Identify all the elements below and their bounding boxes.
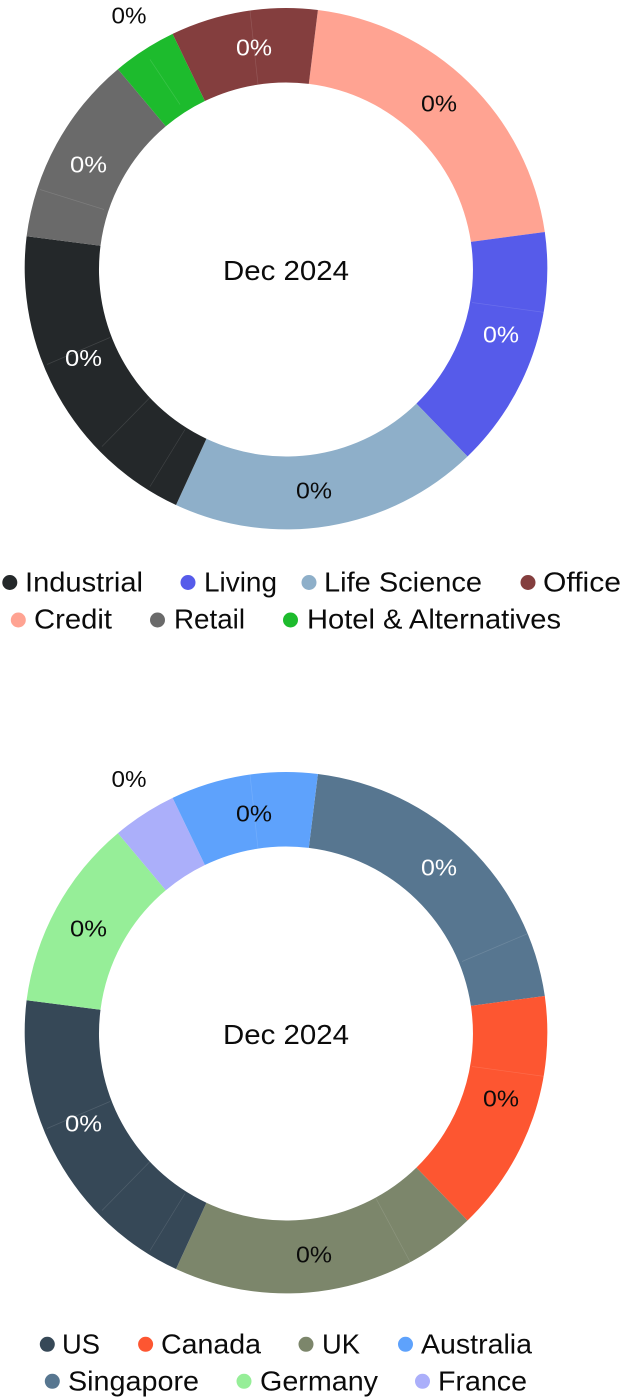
legend item: Office: Office bbox=[543, 567, 621, 598]
segment: Life Science bbox=[176, 404, 468, 529]
label: Singapore percent: 0% bbox=[421, 854, 457, 880]
label: Hotel & Alternatives percent: 0% bbox=[112, 2, 147, 28]
legend item: UK: UK bbox=[322, 1329, 361, 1360]
label: Credit percent: 0% bbox=[421, 90, 457, 116]
label: Germany percent: 0% bbox=[70, 916, 107, 942]
segment: Credit bbox=[309, 10, 545, 242]
segment: Canada bbox=[416, 996, 547, 1220]
segment: Australia bbox=[173, 772, 318, 865]
label: France percent: 0% bbox=[112, 766, 147, 792]
legend item: Hotel & Alternatives: Hotel & Alternatives bbox=[307, 604, 561, 634]
legend item: Australia: Australia bbox=[421, 1329, 533, 1360]
center label: Dec 2024 bbox=[223, 255, 349, 286]
legend item: France: France bbox=[438, 1365, 527, 1396]
segment: Living bbox=[416, 232, 547, 456]
segment: Industrial bbox=[25, 236, 206, 505]
donut ring: geographies bbox=[25, 772, 547, 1293]
legend item: Germany: Germany bbox=[260, 1365, 378, 1396]
panel: sector donut chart bbox=[25, 2, 547, 529]
legend item: Credit: Credit bbox=[34, 604, 112, 634]
label: Office percent: 0% bbox=[236, 34, 272, 60]
legend item: Canada: Canada bbox=[161, 1329, 262, 1360]
segment: Retail bbox=[27, 69, 166, 246]
legend: geographies bbox=[40, 1329, 533, 1396]
legend item: Retail: Retail bbox=[174, 604, 245, 634]
label: UK percent: 0% bbox=[296, 1242, 332, 1268]
label: Australia percent: 0% bbox=[236, 800, 272, 826]
label: US percent: 0% bbox=[65, 1110, 102, 1136]
panel: geography donut chart bbox=[25, 766, 547, 1293]
donut ring: sectors bbox=[25, 8, 547, 529]
legend item: US: US bbox=[62, 1329, 100, 1360]
legend item: Singapore: Singapore bbox=[68, 1365, 199, 1396]
label: Canada percent: 0% bbox=[483, 1086, 519, 1112]
segment: Hotel & Alternatives bbox=[118, 34, 205, 126]
segment: US bbox=[25, 1000, 206, 1269]
segment: Germany bbox=[27, 833, 166, 1010]
legend: sectors bbox=[2, 567, 621, 634]
legend item: Industrial: Industrial bbox=[25, 567, 143, 598]
legend item: US bbox=[40, 1329, 100, 1360]
segment: France bbox=[118, 798, 205, 890]
segment: UK bbox=[176, 1168, 468, 1293]
segment: Office bbox=[173, 8, 318, 101]
legend item: UK bbox=[298, 1329, 361, 1360]
legend item: Living: Living bbox=[204, 567, 277, 598]
center label: Dec 2024 bbox=[223, 1019, 349, 1050]
label: Living percent: 0% bbox=[483, 322, 519, 348]
label: Industrial percent: 0% bbox=[65, 345, 102, 371]
label: Retail percent: 0% bbox=[70, 152, 107, 178]
label: Life Science percent: 0% bbox=[296, 478, 332, 504]
segment: Singapore bbox=[309, 774, 545, 1006]
legend item: Life Science: Life Science bbox=[324, 567, 482, 598]
